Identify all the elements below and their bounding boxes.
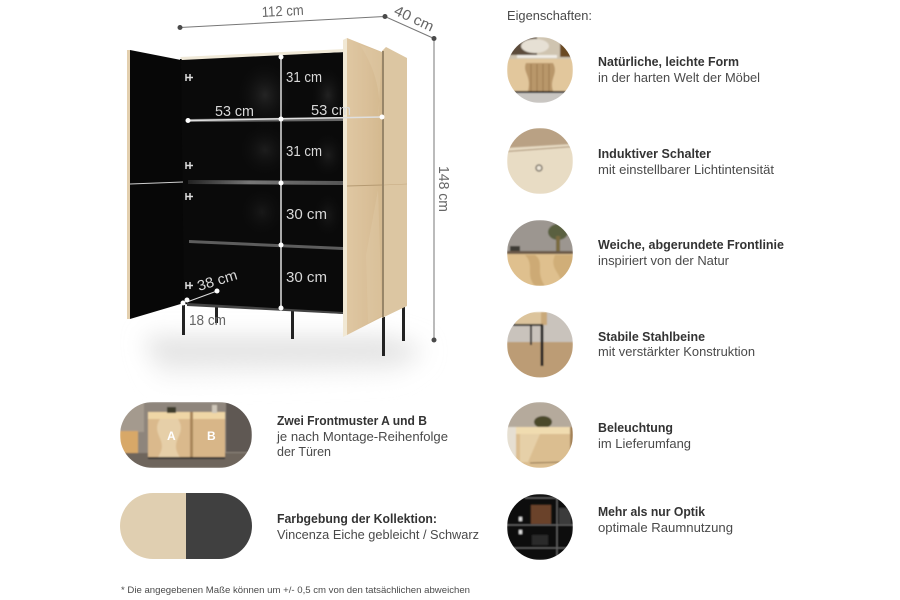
feature photo: soft front line	[507, 220, 573, 286]
overall dimension lines	[178, 14, 436, 342]
dimension labels: 148 cm	[435, 166, 451, 212]
dimension labels: 53 cm	[215, 104, 254, 120]
feature text: front line: Weiche, abgerundete Frontlinie	[598, 238, 784, 252]
dimension labels: 112 cm	[261, 3, 304, 21]
feature text: front line	[598, 238, 784, 268]
cabinet legs	[182, 305, 405, 356]
feature text: more than looks: optimale Raumnutzung	[598, 521, 733, 535]
feature text: lighting: im Lieferumfang	[598, 437, 691, 451]
cabinet illustration	[127, 3, 451, 378]
feature text: switch: Induktiver Schalter	[598, 147, 711, 161]
dimension labels: 30 cm	[286, 207, 327, 223]
pill photo: front patterns A and B	[120, 402, 252, 468]
dimension labels: 31 cm	[286, 70, 322, 86]
feature text: switch	[598, 147, 775, 177]
footnote: * Die angegebenen Maße können um +/- 0,5 cm von den tatsächlichen abweichen	[121, 585, 470, 596]
left door	[127, 50, 184, 319]
cabinet top edge	[180, 49, 345, 60]
dimension labels: 30 cm	[286, 270, 327, 286]
feature text: front line: inspiriert von der Natur	[598, 254, 729, 268]
text: front patterns: der Türen	[277, 445, 331, 459]
cabinet shelves	[187, 117, 343, 314]
heading: Eigenschaften: Eigenschaften:	[507, 9, 592, 23]
feature photo: storage	[507, 494, 573, 560]
feature text: lighting: Beleuchtung	[598, 421, 673, 435]
side panel	[382, 47, 407, 318]
feature text: lighting	[598, 421, 691, 451]
pill photo: front patterns A and B: B	[207, 429, 216, 443]
feature text: natural form: in der harten Welt der Möbel	[598, 71, 760, 85]
feature photo: steel legs	[507, 312, 573, 378]
dimension labels: 31 cm	[286, 144, 322, 160]
text: front patterns: je nach Montage-Reihenfolge	[276, 430, 448, 444]
feature photo: natural form	[507, 37, 574, 103]
text: front patterns	[276, 414, 448, 459]
feature text: steel legs: Stabile Stahlbeine	[598, 330, 705, 344]
feature text: switch: mit einstellbarer Lichtintensität	[598, 163, 775, 177]
cabinet interior	[180, 52, 346, 314]
feature text: natural form: Natürliche, leichte Form	[598, 55, 739, 69]
feature text: more than looks: Mehr als nur Optik	[598, 505, 705, 519]
feature photo: switch	[507, 128, 573, 194]
feature text: steel legs: mit verstärkter Konstruktion	[598, 345, 755, 359]
measure lines inside cabinet	[180, 54, 384, 310]
dimension labels: 18 cm	[189, 313, 226, 329]
dimension labels: 40 cm	[391, 3, 436, 35]
text: front patterns: Zwei Frontmuster A und B	[277, 414, 427, 428]
colour swatch pill	[120, 493, 252, 559]
dimension labels: 53 cm	[311, 103, 351, 119]
dimension labels	[189, 3, 451, 329]
feature text: more than looks	[598, 505, 733, 535]
text: collection colours: Farbgebung der Kollektion:	[277, 512, 437, 526]
dimension labels: 38 cm	[195, 268, 239, 295]
feature text: natural form	[598, 55, 760, 85]
floor shadow	[145, 338, 425, 378]
feature photo: lighting	[507, 402, 573, 468]
text: collection colours: Vincenza Eiche gebleicht / Schwarz	[277, 528, 479, 542]
door hinges	[186, 74, 193, 289]
pill photo: front patterns A and B: A	[167, 429, 176, 443]
right door	[343, 38, 407, 337]
feature text: steel legs	[598, 330, 755, 359]
text: collection colours	[277, 512, 479, 542]
